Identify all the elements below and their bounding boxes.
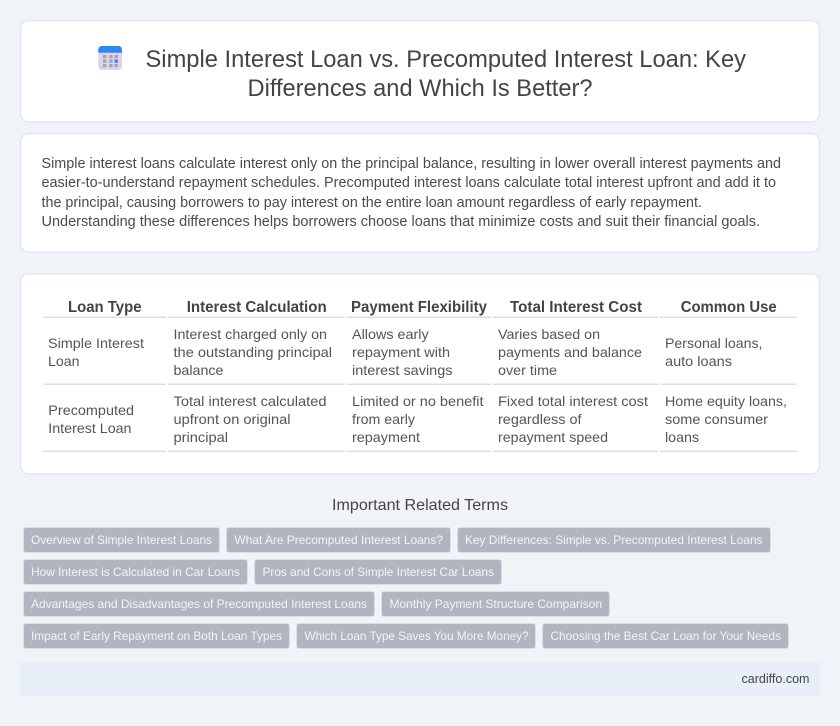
tag: [458, 528, 770, 552]
tag: [542, 624, 788, 648]
table row: precomputed interest loan: Limited or no benefit: [352, 393, 484, 409]
tag: [24, 624, 290, 648]
icon: calendar: [98, 46, 122, 70]
table row: precomputed interest loan: [48, 393, 787, 445]
table row: precomputed interest loan: loans: [665, 429, 699, 445]
tag: What Are Precomputed Interest Loans?: [234, 533, 443, 547]
summary paragraph: Simple interest loans calculate interest only on the principal balance, resulting in lower overall interest payments and: [42, 156, 781, 172]
table row: simple interest loan: Interest charged only on: [174, 326, 327, 342]
tag: Advantages and Disadvantages of Precomputed Interest Loans: [31, 597, 367, 611]
related term tags: [24, 528, 788, 648]
table header row: Interest Calculation: [187, 299, 327, 316]
tag: [24, 528, 220, 552]
table row: simple interest loan: Loan: [48, 353, 80, 369]
title: [146, 46, 746, 102]
tag: Key Differences: Simple vs. Precomputed Interest Loans: [465, 533, 762, 547]
title: Simple Interest Loan vs. Precomputed Interest Loan: Key: [146, 46, 746, 73]
table row: precomputed interest loan: regardless of: [498, 411, 582, 427]
table row: simple interest loan: interest savings: [352, 362, 452, 378]
table header row: Payment Flexibility: [351, 299, 487, 316]
table header row: Total Interest Cost: [510, 299, 643, 316]
table header row: Loan Type: [68, 299, 142, 316]
table header row: [68, 299, 777, 316]
table row: simple interest loan: auto loans: [665, 353, 732, 369]
table row: precomputed interest loan: Total interest calculated: [174, 393, 326, 409]
panel: summary text: [20, 134, 820, 252]
table row: precomputed interest loan: from early: [352, 411, 415, 427]
title: Differences and Which Is Better?: [248, 75, 592, 102]
panel: comparison table: [20, 274, 820, 474]
table row: simple interest loan: repayment with: [352, 344, 450, 360]
tag: [24, 592, 374, 616]
table row: precomputed interest loan: repayment: [352, 429, 420, 445]
table row: simple interest loan: Personal loans,: [665, 335, 762, 351]
table row: precomputed interest loan: upfront on original: [174, 411, 290, 427]
heading: important related terms: Important Related Terms: [332, 497, 508, 514]
table row: precomputed interest loan: Home equity loans,: [665, 393, 787, 409]
tag: Overview of Simple Interest Loans: [31, 533, 212, 547]
tag: Choosing the Best Car Loan for Your Needs: [550, 629, 781, 643]
table header row: Common Use: [681, 299, 777, 316]
table row: simple interest loan: balance: [174, 362, 224, 378]
tag: Which Loan Type Saves You More Money?: [304, 629, 529, 643]
table row: simple interest loan: the outstanding principal: [174, 344, 332, 360]
tag: How Interest is Calculated in Car Loans: [31, 565, 240, 579]
table row: precomputed interest loan: Interest Loan: [48, 420, 131, 436]
table row: precomputed interest loan: Precomputed: [48, 402, 134, 418]
summary paragraph: easier-to-understand repayment schedules. Precomputed interest loans calculate total interest upfront and add it to: [42, 175, 776, 191]
tag: [254, 560, 502, 584]
table row: simple interest loan: Allows early: [352, 326, 429, 342]
tag: [296, 624, 536, 648]
tag: Impact of Early Repayment on Both Loan Types: [31, 629, 282, 643]
table row: simple interest loan: over time: [498, 362, 557, 378]
table row: precomputed interest loan: Fixed total interest cost: [498, 393, 648, 409]
tag: Monthly Payment Structure Comparison: [390, 597, 602, 611]
tag: Pros and Cons of Simple Interest Car Loans: [262, 565, 494, 579]
table row: precomputed interest loan: repayment speed: [498, 429, 608, 445]
table row: precomputed interest loan: principal: [174, 429, 228, 445]
tag: [24, 560, 248, 584]
table row: simple interest loan: payments and balance: [498, 344, 642, 360]
tag: [226, 528, 450, 552]
tag: [382, 592, 610, 616]
table row: simple interest loan: Varies based on: [498, 326, 600, 342]
summary paragraph: Understanding these differences helps borrowers choose loans that minimize costs and suit their financial goals.: [42, 214, 760, 230]
table row: simple interest loan: Simple Interest: [48, 335, 144, 351]
panel: title card: [20, 20, 820, 122]
table row: simple interest loan: [48, 326, 762, 378]
table row: precomputed interest loan: some consumer: [665, 411, 768, 427]
footer bar: [20, 662, 820, 696]
footer bar: cardiffo.com: [742, 672, 810, 686]
summary paragraph: [42, 156, 781, 230]
summary paragraph: the principal, causing borrowers to pay interest on the entire loan amount regardless of early repayment.: [42, 195, 702, 211]
